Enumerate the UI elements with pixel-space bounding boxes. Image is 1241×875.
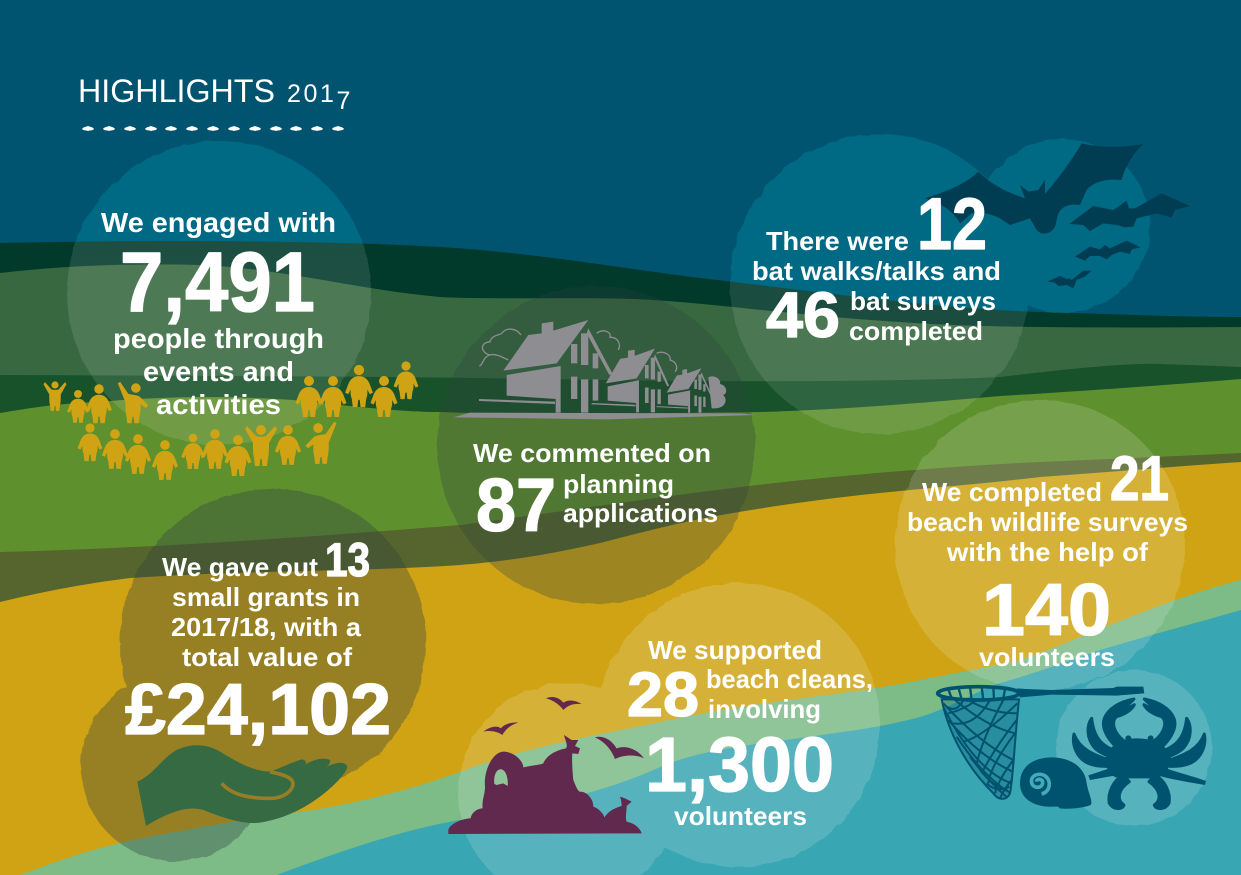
- background: mid green hills: [0, 264, 1241, 875]
- title: 7: [337, 87, 353, 115]
- text block: bat walks and surveys: 12: [917, 184, 987, 265]
- text block: beach cleans: [627, 635, 873, 831]
- background: dark distant hills: [0, 241, 1241, 875]
- text block: beach wildlife surveys: 21: [1110, 444, 1169, 514]
- text block: planning applications: applications: [563, 498, 718, 528]
- text block: beach cleans: volunteers: [674, 801, 807, 831]
- text block: planning applications: [473, 438, 718, 547]
- text block: beach wildlife surveys: beach wildlife surveys: [907, 507, 1188, 537]
- background: yellow sand: [0, 462, 1241, 875]
- icon: snail shell: [1020, 757, 1091, 809]
- title: [78, 73, 353, 115]
- text block: small grants: We gave out: [162, 552, 318, 582]
- icon: crab: [1073, 699, 1206, 809]
- icon: large bat: [925, 143, 1143, 234]
- icon: open hand: [137, 745, 347, 826]
- background: teal sea: [277, 610, 1241, 875]
- text block: small grants: total value of: [182, 642, 352, 672]
- text block: small grants: small grants in: [172, 582, 360, 612]
- icon: pile of rubbish bags: [448, 735, 642, 834]
- blob: planning panel: [437, 286, 755, 604]
- background: bright green fields: [0, 379, 1241, 875]
- icon: bats: [925, 143, 1190, 288]
- background: dark green hedgerow band: [0, 364, 1241, 875]
- text block: people engaged: events and: [143, 356, 294, 387]
- text block: bat walks and surveys: completed: [849, 316, 983, 346]
- blob: people engaged panel: [67, 141, 371, 445]
- text block: beach wildlife surveys: [907, 444, 1188, 672]
- blob: small grants panel: [81, 489, 426, 861]
- text block: bat walks and surveys: There were: [766, 226, 909, 256]
- title: 201: [287, 80, 337, 108]
- text block: small grants: £24,102: [125, 670, 391, 750]
- text block: beach wildlife surveys: 140: [982, 570, 1111, 651]
- text block: people engaged: people through: [113, 323, 324, 354]
- text block: bat walks and surveys: bat walks/talks and: [752, 256, 1001, 286]
- text block: beach cleans: 1,300: [645, 722, 834, 808]
- text block: planning applications: 87: [476, 463, 556, 547]
- icon: crowd of people: [43, 361, 418, 480]
- icon: net, shell and crab: [938, 687, 1206, 809]
- text block: beach wildlife surveys: We completed: [922, 477, 1102, 507]
- title: HIGHLIGHTS: [78, 73, 275, 109]
- text block: bat walks and surveys: 46: [766, 279, 840, 351]
- text block: planning applications: We commented on: [473, 438, 711, 468]
- icon: rubbish bags and birds: [448, 697, 644, 834]
- text block: small grants: [125, 533, 391, 750]
- icon: seagull left: [483, 722, 518, 735]
- text block: people engaged: 7,491: [120, 235, 315, 329]
- text block: bat walks and surveys: [752, 184, 1001, 351]
- text block: people engaged: [101, 207, 336, 420]
- text block: small grants: 13: [325, 533, 370, 586]
- background: pale green shallows: [20, 580, 1241, 875]
- text block: planning applications: planning: [563, 469, 674, 499]
- icon: seagull top: [546, 697, 582, 710]
- text block: beach cleans: beach cleans,: [706, 664, 873, 694]
- text block: people engaged: activities: [156, 389, 281, 420]
- text block: beach cleans: We supported: [648, 635, 822, 665]
- blob: beach cleans panel: [458, 583, 880, 875]
- icon: medium bat: [1069, 193, 1190, 231]
- icon: row of houses: [453, 320, 757, 419]
- blob: bat walks panel: [730, 134, 1150, 434]
- blob: beach surveys panel: [895, 400, 1212, 826]
- text block: beach wildlife surveys: with the help of: [946, 537, 1148, 567]
- text block: people engaged: We engaged with: [101, 207, 336, 238]
- title underline of tiny bats: [82, 126, 344, 131]
- icon: tiny bat: [1047, 271, 1092, 288]
- icon: fishing net: [938, 687, 1144, 799]
- background: olive dune band: [0, 453, 1241, 875]
- icon: small bat: [1075, 241, 1141, 261]
- text block: bat walks and surveys: bat surveys: [850, 286, 996, 316]
- text block: beach cleans: involving: [708, 694, 821, 724]
- text block: small grants: 2017/18, with a: [171, 612, 362, 642]
- text block: beach wildlife surveys: volunteers: [979, 642, 1115, 672]
- icon: seagull right: [595, 737, 644, 759]
- text block: beach cleans: 28: [627, 660, 699, 730]
